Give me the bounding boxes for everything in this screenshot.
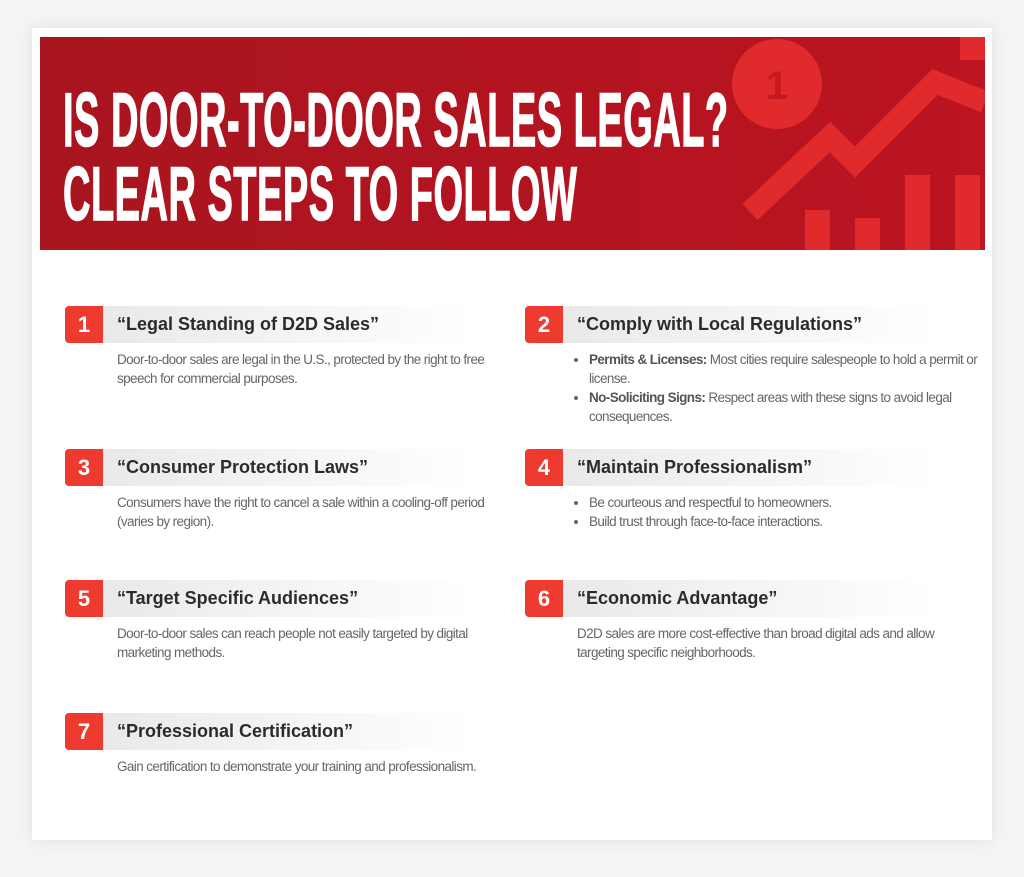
- item 3: 3: [78, 455, 90, 480]
- item 6: 6: [538, 586, 550, 611]
- item 5: 5: [78, 586, 90, 611]
- item 2: [525, 306, 978, 424]
- item 3: “Consumer Protection Laws”: [117, 457, 368, 477]
- title: CLEAR STEPS TO FOLLOW: [63, 152, 577, 237]
- item 7: [65, 713, 476, 774]
- item 7: 7: [78, 719, 90, 744]
- item 1: [65, 306, 484, 386]
- item 1: 1: [78, 312, 90, 337]
- item 6: [525, 580, 935, 660]
- item 5: [65, 580, 468, 660]
- item 7: Gain certification to demonstrate your training and professionalism.: [117, 759, 476, 774]
- icon: chart background: [732, 37, 985, 250]
- title: [63, 78, 729, 237]
- item 4: [525, 449, 832, 529]
- item 4: “Maintain Professionalism”: [577, 457, 812, 477]
- title: IS DOOR-TO-DOOR SALES LEGAL?: [63, 78, 729, 163]
- item 5: Door-to-door sales can reach people not easily targeted by digital marketing methods.: [117, 626, 468, 660]
- item 2: Permits & Licenses: Most cities require salespeople to hold a permit or license.: [589, 352, 977, 386]
- item 3: [65, 449, 484, 529]
- item 1: Door-to-door sales are legal in the U.S., protected by the right to free speech for commercial purposes.: [117, 352, 484, 386]
- item 4: Be courteous and respectful to homeowners.: [589, 495, 832, 510]
- item 7: “Professional Certification”: [117, 721, 353, 741]
- item 4: Build trust through face-to-face interactions.: [589, 514, 823, 529]
- item 1: “Legal Standing of D2D Sales”: [117, 314, 379, 334]
- item 5: “Target Specific Audiences”: [117, 588, 358, 608]
- item 4: 4: [538, 455, 550, 480]
- item 6: D2D sales are more cost-effective than broad digital ads and allow targeting specific neighborhoods.: [577, 626, 934, 660]
- item 2: 2: [538, 312, 550, 337]
- icon: chart background: 1: [766, 64, 788, 108]
- banner: [40, 37, 985, 250]
- item 6: “Economic Advantage”: [577, 588, 777, 608]
- item 3: Consumers have the right to cancel a sale within a cooling-off period (varies by region).: [117, 495, 484, 529]
- item 2: No-Soliciting Signs: Respect areas with these signs to avoid legal consequences.: [589, 390, 952, 424]
- item 2: “Comply with Local Regulations”: [577, 314, 862, 334]
